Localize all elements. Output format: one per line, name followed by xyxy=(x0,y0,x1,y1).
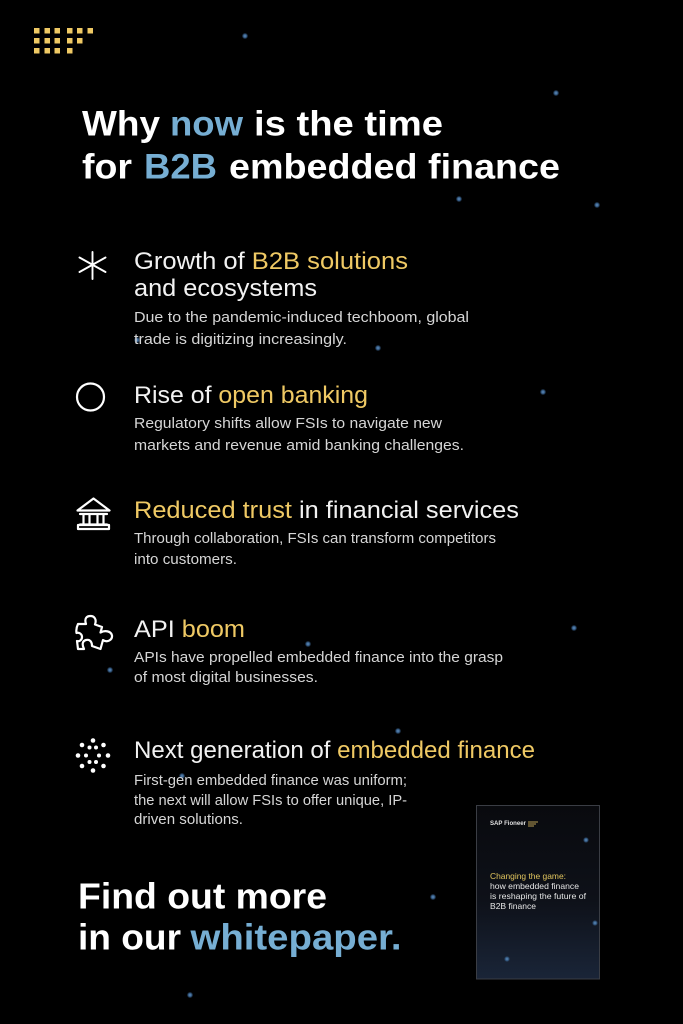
title: is the time xyxy=(254,104,443,144)
text: next generation description: driven solutions. xyxy=(134,812,243,828)
call to action: Find out more xyxy=(78,876,327,916)
text: growth description: Due to the pandemic-induced techboom, global xyxy=(134,310,469,326)
text: API description: of most digital businesses. xyxy=(134,670,318,686)
text: open banking description: markets and revenue amid banking challenges. xyxy=(134,438,464,454)
cover brand: SAP Fioneer xyxy=(490,820,526,827)
item: API boom xyxy=(76,616,503,686)
heading: next generation: Next generation of embedded finance xyxy=(134,737,535,764)
icon: puzzle piece xyxy=(76,616,112,649)
text: API description: APIs have propelled embedded finance into the grasp xyxy=(134,650,503,666)
cover title xyxy=(490,871,587,911)
logo: yellow dot grid xyxy=(34,28,93,54)
title: Why xyxy=(82,104,161,144)
text: next generation description xyxy=(134,773,407,828)
item: next generation xyxy=(76,737,535,828)
title xyxy=(82,104,560,186)
cover title: is reshaping the future of xyxy=(490,891,587,901)
heading: growth of B2B solutions: Growth of B2B solutions xyxy=(134,248,408,275)
icon: bank building xyxy=(78,498,110,529)
whitepaper cover xyxy=(476,806,600,979)
call to action: in our xyxy=(78,916,181,958)
item: rise of open banking xyxy=(77,382,464,454)
call to action: whitepaper. xyxy=(189,916,402,958)
item: growth of B2B solutions xyxy=(80,248,469,348)
text: open banking description xyxy=(134,416,464,454)
text: reduced trust description: into customers. xyxy=(134,552,237,568)
title: embedded finance xyxy=(229,148,560,186)
heading: rise of open banking: Rise of open banking xyxy=(134,382,368,409)
heading: reduced trust: Reduced trust in financial services xyxy=(134,497,519,524)
heading: API boom: API boom xyxy=(134,616,245,643)
cover title: B2B finance xyxy=(490,901,536,911)
item: reduced trust xyxy=(78,497,519,568)
text: open banking description: Regulatory shifts allow FSIs to navigate new xyxy=(134,416,443,432)
title: B2B xyxy=(144,148,217,186)
text: next generation description: First-gen embedded finance was uniform; xyxy=(134,773,407,789)
cover title: how embedded finance xyxy=(490,881,579,891)
cover title: Changing the game: xyxy=(490,871,566,881)
heading: growth of B2B solutions xyxy=(134,248,408,302)
title: now xyxy=(170,104,244,144)
text: reduced trust description xyxy=(134,531,496,568)
icon: dot burst xyxy=(76,738,110,773)
text: reduced trust description: Through collaboration, FSIs can transform competitors xyxy=(134,531,496,547)
call to action xyxy=(78,876,402,958)
icon: circle xyxy=(77,384,104,410)
heading: growth of B2B solutions: and ecosystems xyxy=(134,275,317,302)
title: for xyxy=(82,148,132,186)
text: next generation description: the next will allow FSIs to offer unique, IP- xyxy=(134,793,407,809)
icon: asterisk xyxy=(80,252,106,279)
text: growth description: trade is digitizing increasingly. xyxy=(134,332,347,348)
text: API description xyxy=(134,650,503,686)
text: growth description xyxy=(134,310,469,348)
